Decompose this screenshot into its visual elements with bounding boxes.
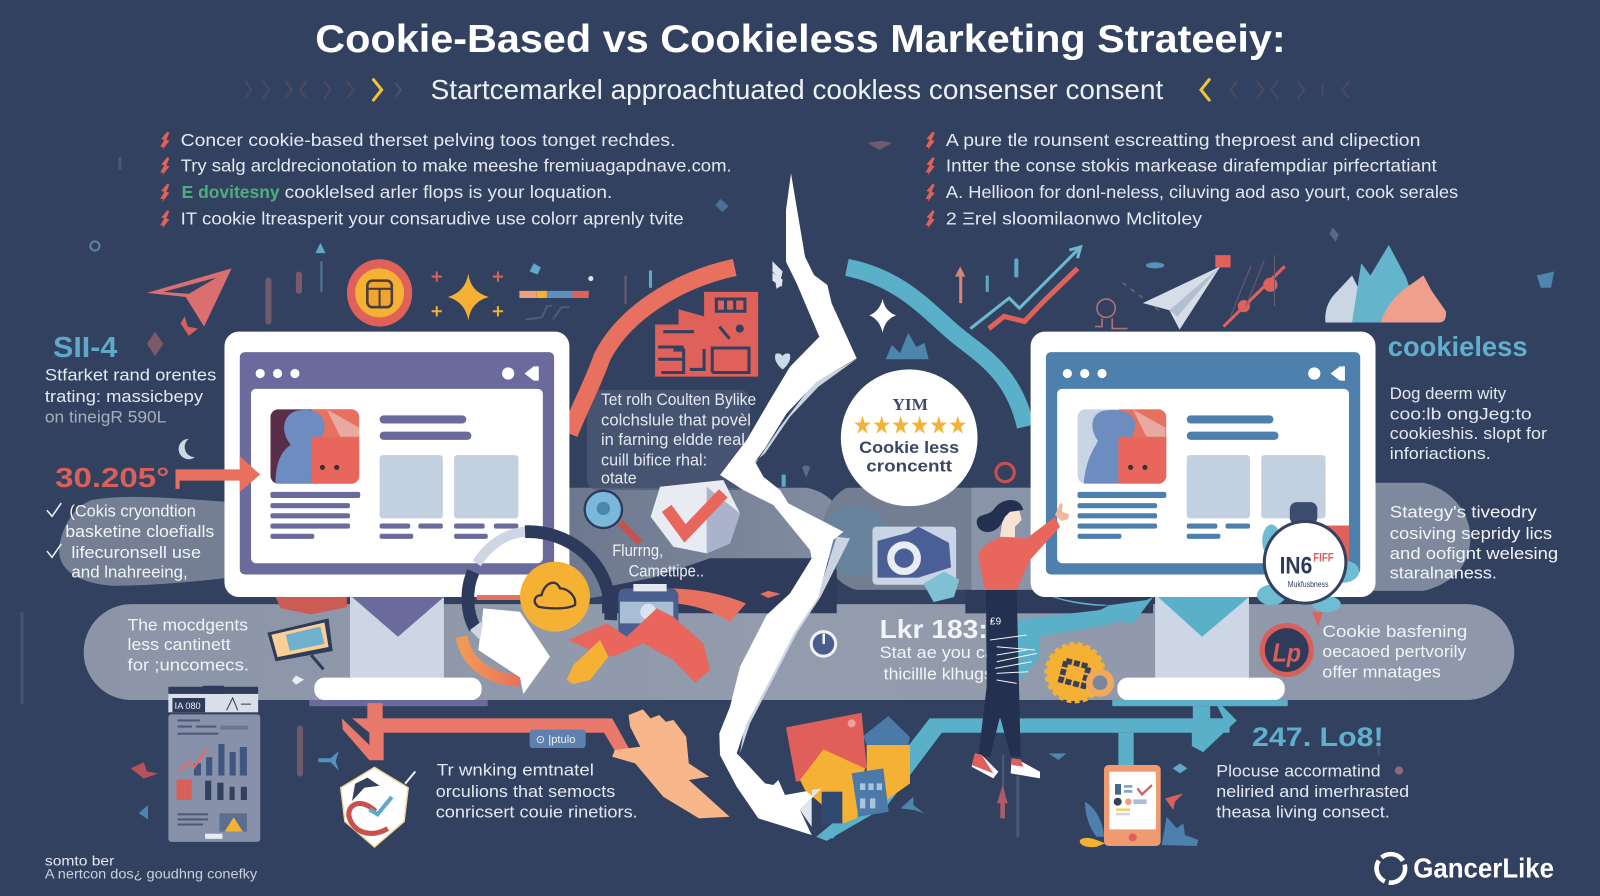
woman figure [972,500,1111,778]
badge: IN6 [1280,553,1312,580]
left column description: trating: massicbepy [45,388,204,406]
subtitle: Startcemarkel approachtuated cookless consenser consent [431,74,1164,105]
icon: shield [341,767,415,847]
checklist: and lnahreeing, [71,564,188,582]
stat: Lkr 183: Stat ae you ca [880,644,996,662]
right lower text: Plocuse accormatind [1216,763,1381,781]
gray band: left blob [59,497,230,586]
gear icon small [1089,672,1111,693]
icon: outline head [1095,283,1163,329]
lower pill text left [128,617,249,674]
bullet list right [926,130,1459,229]
bullet list right: 2 Ξrel sloomilaonwo Mclitoley [946,209,1202,229]
dark dial arc [525,532,611,620]
bullet list left: Concer cookie-based therset pelving toos tonget rechdes. [181,130,676,150]
white drops [772,261,783,289]
text backdrop: middle column [587,390,750,490]
illustration: dial, hand and shield [462,480,746,694]
right column description: coo:lb ongJeg:to [1390,405,1532,423]
checklist: lifecuronsell use [71,544,201,562]
lower gray pill [84,604,1514,700]
right column description: cookieshis. slopt for [1390,425,1548,443]
document report icon: ⅠA 080 [174,701,201,711]
arrow to monitor [176,456,260,492]
left lower text: Tr wnking emtnatel [437,762,594,780]
scattered decorative marks [20,141,1554,837]
footer note: somto ber [45,853,115,869]
bullet list left: IT cookie ltreasperit your consarudive use colorr aprenly tvite [181,209,684,229]
white paper [478,608,550,694]
woman sweater [978,517,1060,590]
red arc [569,267,735,434]
bullet list left: Try salg arcldrecionotation to make meeshe fremiuagapdnave.com. [181,155,732,175]
caption: flurrng [612,542,704,581]
gold cookie coin [520,562,590,632]
caption: flurrng: Camettipe.. [629,563,704,581]
decorative chevrons left [246,80,401,100]
power icon [811,632,836,656]
badge [1257,502,1359,627]
left monitor stand [276,597,488,706]
circle caption [859,439,959,475]
document report icon [168,686,260,842]
crack body [719,173,857,835]
right lower text [1216,763,1409,821]
left monitor frame [224,332,569,597]
left lower text: conricsert couie rinetiors. [436,803,638,821]
left lower text [436,762,638,821]
left browser dots [256,366,539,381]
right browser dots [1063,366,1345,381]
middle column text: otate [601,470,637,488]
rating stars: ★★★★★★ [853,413,967,440]
right monitor frame [1031,332,1376,597]
red hand [568,608,710,683]
shield with check [651,480,740,553]
middle column text: colchslule that povèl [601,412,751,430]
woman shoes [972,753,998,778]
footer note: A nertcon dos¿ goudhng conefky [45,867,258,883]
yellow strip [567,640,608,684]
left profile image [270,409,359,484]
left lower text: orculions that semocts [436,783,615,801]
left column description: Stfarket rand orentes [45,367,216,385]
checklist: basketine cloefialls [65,523,214,541]
icon: house illustration [786,713,910,838]
icon: small tablet [267,618,333,685]
icon: red badge: Lp [1272,639,1301,667]
right column description: Dog deerm wity [1390,385,1507,403]
middle column text: in farning eldde real [601,431,745,449]
icon: red building [655,292,758,377]
center cookie circle [841,369,978,506]
icon: red chat bubble [996,463,1014,482]
icon: mountains [1325,245,1446,322]
heading: cookieless: cookieless [1388,331,1528,362]
footer note [45,853,258,883]
icon: up arrows [955,258,1164,303]
stat: 247: 247. Lo8! [1252,722,1384,752]
color bar [519,291,589,319]
badge: Mukfusbness [1288,580,1329,589]
woman small label: ₤9 [990,617,1001,628]
lower pill text right: Cookie basfening [1322,623,1467,641]
left column description [45,367,216,426]
checklist: (Cokis cryondtion [69,502,196,520]
stat figure: 30.205° [55,462,169,493]
lower pill text right [1322,623,1467,682]
stat: Lkr 183: thicillle klhugs [884,666,993,684]
icon: tag label: ⊙ |ptulo [536,734,575,746]
right lower text: neliried and imerhrasted [1216,783,1409,801]
teal arc [847,267,1026,427]
right content lines [1078,415,1279,539]
circle caption: Cookie less [859,439,959,457]
right monitor [1017,332,1376,706]
right lower text: theasa living consect. [1216,803,1390,821]
gray band: middle right [800,488,1036,590]
gray band: middle left [566,488,847,602]
title: Cookie-Based vs Cookieless Marketing Strateeiy: [315,18,1286,61]
logo: GancerLike [1413,853,1554,884]
right browser window [1046,352,1360,575]
right pill text [1390,503,1558,583]
lower pill text left: less cantinett [128,636,231,654]
icon: right paper plane [1143,255,1231,330]
magnifier [585,491,622,528]
icon: peach hand [612,709,730,818]
orange arc [462,637,520,681]
stat: Lkr 183 [880,616,996,684]
motion lines [990,635,1037,683]
right pill text: cosiving sepridy lics [1390,525,1552,543]
salmon band [620,588,746,622]
red connector left [342,703,633,760]
decorative chevrons right [1201,80,1349,100]
left column stat heading: SII-4 [53,332,117,364]
middle column text [601,391,756,488]
gear icon large [1047,644,1103,701]
right monitor stand [1112,597,1288,706]
right pill text: Stategy's tiveodry [1390,503,1538,521]
crack divider [719,173,857,835]
middle column text: cuill bifice rhal: [601,451,707,469]
dark strip over pill left [602,558,837,613]
bullet list right: A. Hellioon for donl-neless, ciluving aod aso yourt, cook serales [946,182,1459,202]
icon: white sparkle [869,299,896,333]
left content cards [380,455,518,518]
icon: tag label [530,730,586,748]
bullet list left: E dovitesny [182,182,280,202]
woman neck and face [1000,507,1022,537]
bullet list left [160,130,732,229]
checklist [47,502,214,582]
teal shadow curve [1017,583,1153,683]
icon: yellow sparkle [432,271,503,320]
right column description [1390,385,1548,463]
woman hand [1055,503,1069,521]
left browser window [240,352,554,575]
light dial arc [477,532,525,563]
lower pill text right: offer mnatages [1322,664,1441,682]
right column description: inforiactions. [1390,445,1491,463]
cloud icon [535,583,575,608]
red dash icon [760,591,781,598]
badge: FIFF [1313,550,1334,564]
right profile image [1078,409,1166,484]
left column description: on tineigR 590L [45,408,166,426]
camera panel light column [971,488,1035,590]
icon: left paper plane [147,268,232,336]
stat: Lkr 183: Lkr 183: [880,616,988,644]
camera tile [820,506,959,602]
dark strip over pill right [965,590,1153,613]
circle caption: croncentt [866,457,953,475]
woman legs [978,590,1021,757]
right pill text: and oofignt welesing [1390,545,1558,563]
left monitor [224,332,569,706]
left content lines [270,415,518,539]
teal connector right [816,706,1237,841]
right pill text: staralnaness. [1390,565,1497,583]
bullet list left: cooklelsed arler flops is your loquation. [285,182,612,202]
right content cards [1187,455,1326,518]
right chart arrow [970,247,1081,329]
lower pill text left: The mocdgents [128,617,248,635]
icon: red connected nodes [1223,255,1285,327]
middle column text: Tet rolh Coulten Bylike [601,391,756,409]
crack shadow [740,359,857,753]
icon: red badge [1262,626,1311,675]
center cookie circle: YIM [892,395,928,414]
woman hair [977,500,1023,532]
icon: cookie jar badge [347,259,412,327]
gray band: right [1367,483,1470,591]
lower pill text right: oecaoed pertvorily [1322,643,1467,661]
caption: flurrng: Flurrng, [612,542,663,560]
icon: phone [901,753,1198,847]
controller device [618,588,678,637]
bullet list right: A pure tle rounsent escreatting theproest and clipection [946,130,1420,150]
lower pill text left: for ;uncomecs. [128,656,249,674]
icon: blue leaves [886,333,929,359]
bullet list right: Intter the conse stokis markease dirafempdiar pirfecrtatiant [946,155,1437,175]
